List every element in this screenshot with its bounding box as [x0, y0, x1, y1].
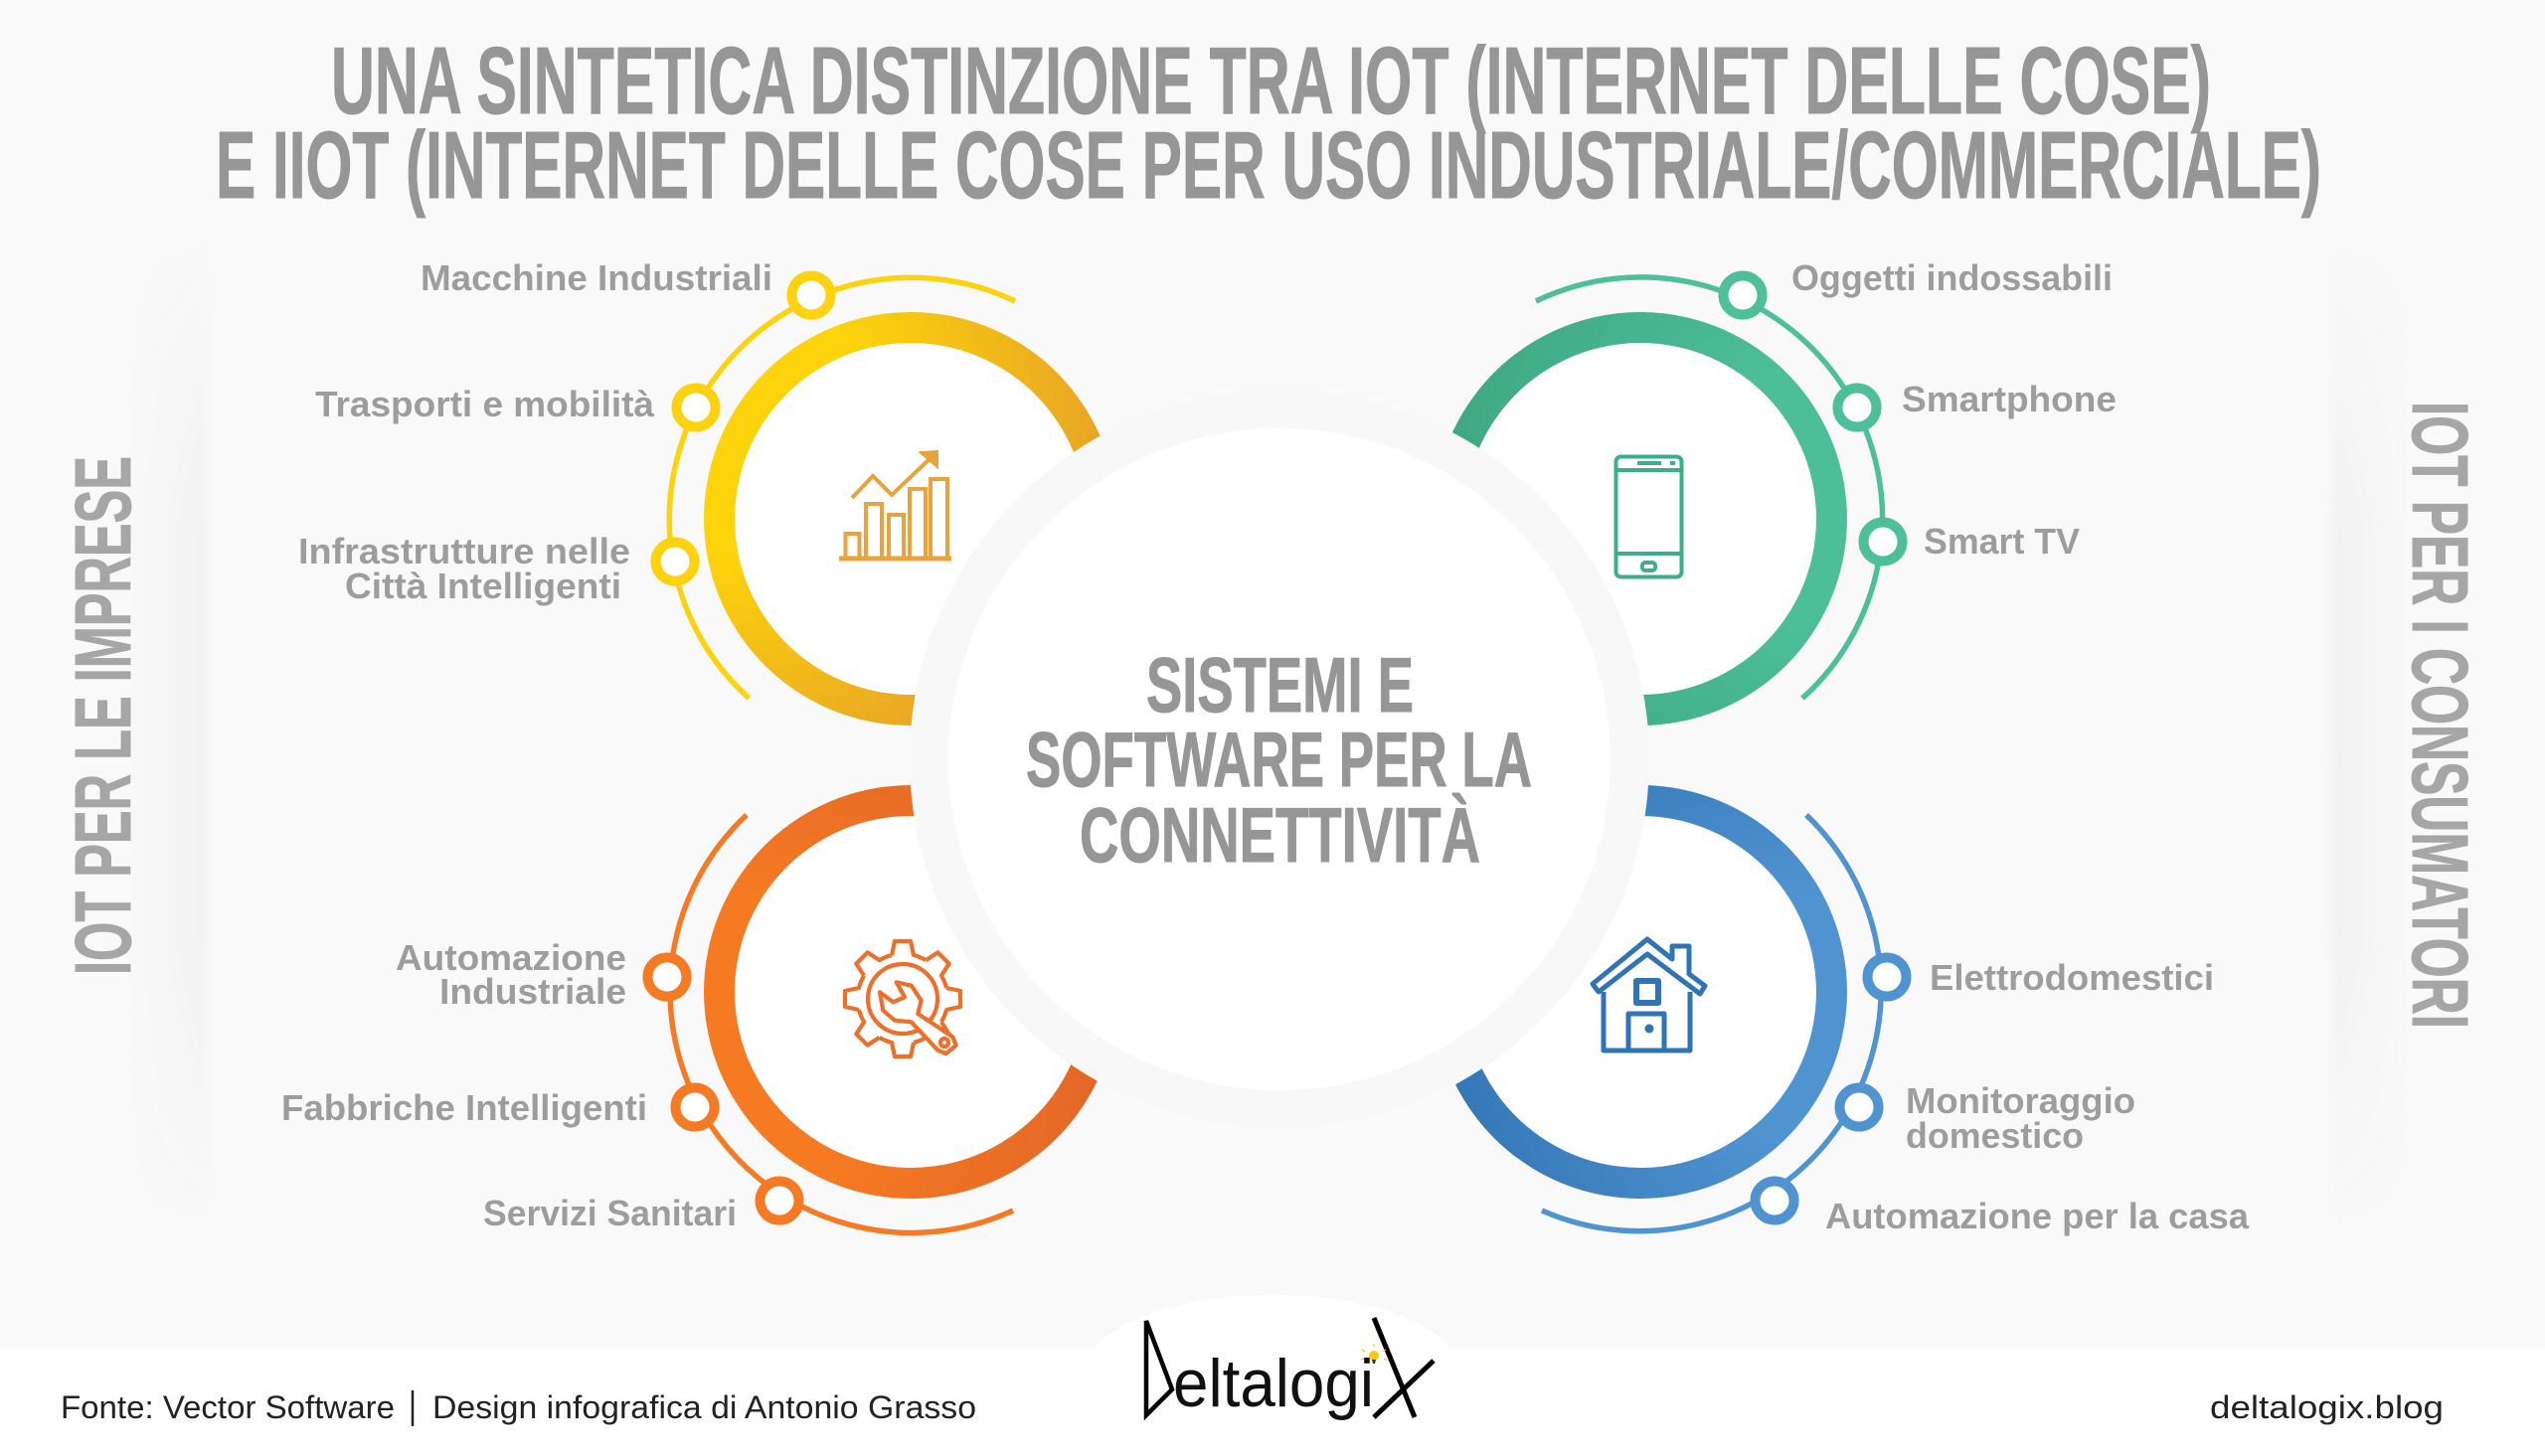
green nodes	[1724, 276, 1903, 561]
side label: IoT per i consumatori: IOT PER I CONSUMATORI	[2396, 402, 2484, 1029]
side label: IoT per le imprese: IOT PER LE IMPRESE	[59, 456, 147, 975]
label: Automazione per la casa: Automazione per la casa	[1825, 1196, 2250, 1236]
label: Monitoraggio domestico	[1906, 1080, 2135, 1156]
central heading: SOFTWARE PER LA	[1026, 716, 1532, 803]
icon: smartphone	[1616, 457, 1682, 576]
footer site url: deltalogix.blog	[2210, 1389, 2444, 1425]
blue thin arc	[1542, 815, 1881, 1231]
label: Fabbriche Intelligenti: Fabbriche Intelligenti	[281, 1087, 647, 1128]
central heading: CONNETTIVITÀ	[1080, 791, 1480, 879]
label: Macchine Industriali: Macchine Industriali	[421, 257, 772, 298]
yellow thick arc	[720, 328, 1096, 711]
label: Automazione Industriale	[396, 937, 626, 1012]
panel: orange quadrant	[281, 800, 1096, 1233]
panel: central circle	[910, 390, 1649, 1129]
label: Monitoraggio domestico: Monitoraggio	[1906, 1080, 2135, 1121]
orange thick arc	[720, 800, 1096, 1183]
label: Smart TV: Smart TV	[1924, 521, 2080, 562]
label: Automazione Industriale: Automazione	[396, 937, 626, 978]
footer source credit	[61, 1389, 976, 1426]
yellow thin arc	[669, 277, 1015, 699]
icon: lightbulb	[1361, 1344, 1387, 1364]
logo: Deltalogix	[1146, 1318, 1434, 1421]
label: Servizi Sanitari: Servizi Sanitari	[483, 1193, 737, 1233]
blue thick arc	[1455, 800, 1831, 1183]
label: Monitoraggio domestico: domestico	[1906, 1115, 2084, 1156]
green thin arc	[1536, 277, 1883, 699]
title	[216, 28, 2321, 219]
orange thin arc	[670, 815, 1013, 1232]
icon: bar chart with rising arrow	[839, 452, 951, 559]
label: Elettrodomestici: Elettrodomestici	[1930, 957, 2214, 998]
label: Infrastrutture nelle Città Intelligenti: Infrastrutture nelle	[298, 531, 630, 571]
label: Trasporti e mobilità: Trasporti e mobilità	[315, 384, 655, 424]
label: Infrastrutture nelle Città Intelligenti: Città Intelligenti	[345, 566, 621, 606]
central heading: SISTEMI E	[1146, 641, 1414, 728]
yellow nodes	[656, 276, 831, 580]
footer source credit: Design infografica di Antonio Grasso	[432, 1389, 976, 1425]
logo: Deltalogix: eltalogi	[1173, 1346, 1374, 1421]
panel: green quadrant	[1455, 257, 2117, 711]
label: Smartphone: Smartphone	[1902, 379, 2117, 419]
icon: house	[1593, 939, 1705, 1051]
footer source credit: Fonte: Vector Software	[61, 1389, 395, 1425]
label: Oggetti indossabili: Oggetti indossabili	[1791, 257, 2113, 298]
central heading	[1026, 641, 1532, 879]
label: Automazione Industriale: Industriale	[439, 971, 626, 1012]
panel: yellow quadrant	[298, 257, 1096, 711]
icon: gear with wrench	[845, 941, 960, 1056]
orange nodes	[648, 958, 799, 1220]
label: Infrastrutture nelle Città Intelligenti	[298, 531, 630, 606]
blue nodes	[1756, 958, 1907, 1220]
panel: blue quadrant	[1455, 800, 2250, 1236]
footer band	[0, 1295, 2545, 1456]
green thick arc	[1455, 328, 1831, 711]
